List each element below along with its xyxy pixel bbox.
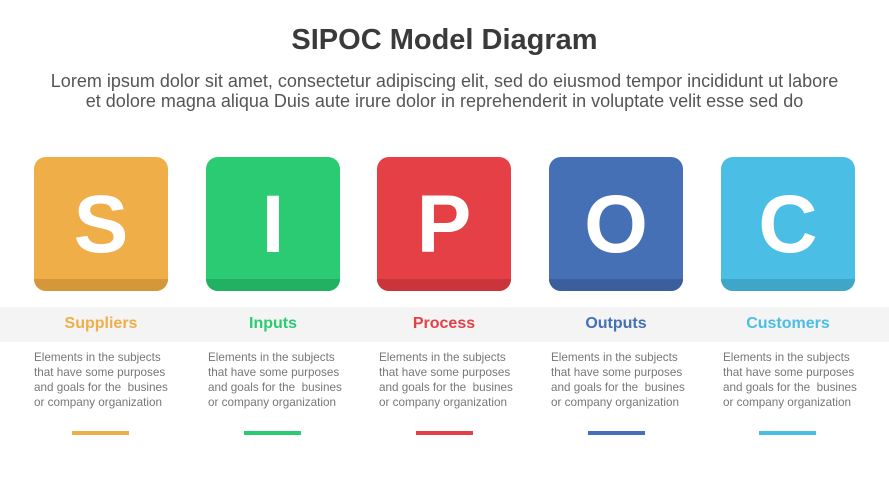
text 4 <box>551 351 685 409</box>
subtitle: Lorem ipsum dolor sit amet, consectetur adipiscing elit, sed do eiusmod tempor incididunt ut labore <box>51 71 838 91</box>
text 2 <box>208 351 342 409</box>
text 1: or company organization <box>34 396 162 409</box>
subtitle: et dolore magna aliqua Duis aute irure dolor in reprehenderit in voluptate velit esse sed do <box>86 91 803 111</box>
text 4: that have some purposes <box>551 366 682 379</box>
box C <box>721 157 855 291</box>
box I: I <box>262 179 284 270</box>
text 1: and goals for the busines <box>34 381 168 394</box>
text 5 <box>723 351 857 409</box>
title: SIPOC Model Diagram <box>291 24 598 56</box>
text 5: that have some purposes <box>723 366 854 379</box>
text 1 <box>34 351 168 409</box>
box O: O <box>584 179 648 270</box>
bar 2 <box>244 431 301 435</box>
box C: C <box>758 179 818 270</box>
text 1: Elements in the subjects <box>34 351 161 364</box>
label Customers: Customers <box>746 315 830 332</box>
bar 4 <box>588 431 645 435</box>
text 5: or company organization <box>723 396 851 409</box>
label band <box>0 307 889 342</box>
text 4: Elements in the subjects <box>551 351 678 364</box>
bar 3 <box>416 431 473 435</box>
bar 5 <box>759 431 816 435</box>
text 3: that have some purposes <box>379 366 510 379</box>
text 2: that have some purposes <box>208 366 339 379</box>
box S <box>34 157 168 291</box>
text 5: and goals for the busines <box>723 381 857 394</box>
label Inputs: Inputs <box>249 315 297 332</box>
bar 1 <box>72 431 129 435</box>
text 5: Elements in the subjects <box>723 351 850 364</box>
text 2: and goals for the busines <box>208 381 342 394</box>
text 3: Elements in the subjects <box>379 351 506 364</box>
text 3: and goals for the busines <box>379 381 513 394</box>
box I <box>206 157 340 291</box>
box S: S <box>74 179 128 270</box>
text 4: or company organization <box>551 396 679 409</box>
label Process: Process <box>413 315 475 332</box>
label Outputs: Outputs <box>585 315 647 332</box>
box P: P <box>417 179 471 270</box>
box P <box>377 157 511 291</box>
text 2: or company organization <box>208 396 336 409</box>
subtitle <box>51 71 838 111</box>
text 3 <box>379 351 513 409</box>
text 4: and goals for the busines <box>551 381 685 394</box>
text 2: Elements in the subjects <box>208 351 335 364</box>
text 3: or company organization <box>379 396 507 409</box>
box O <box>549 157 683 291</box>
text 1: that have some purposes <box>34 366 165 379</box>
label Suppliers: Suppliers <box>65 315 137 332</box>
